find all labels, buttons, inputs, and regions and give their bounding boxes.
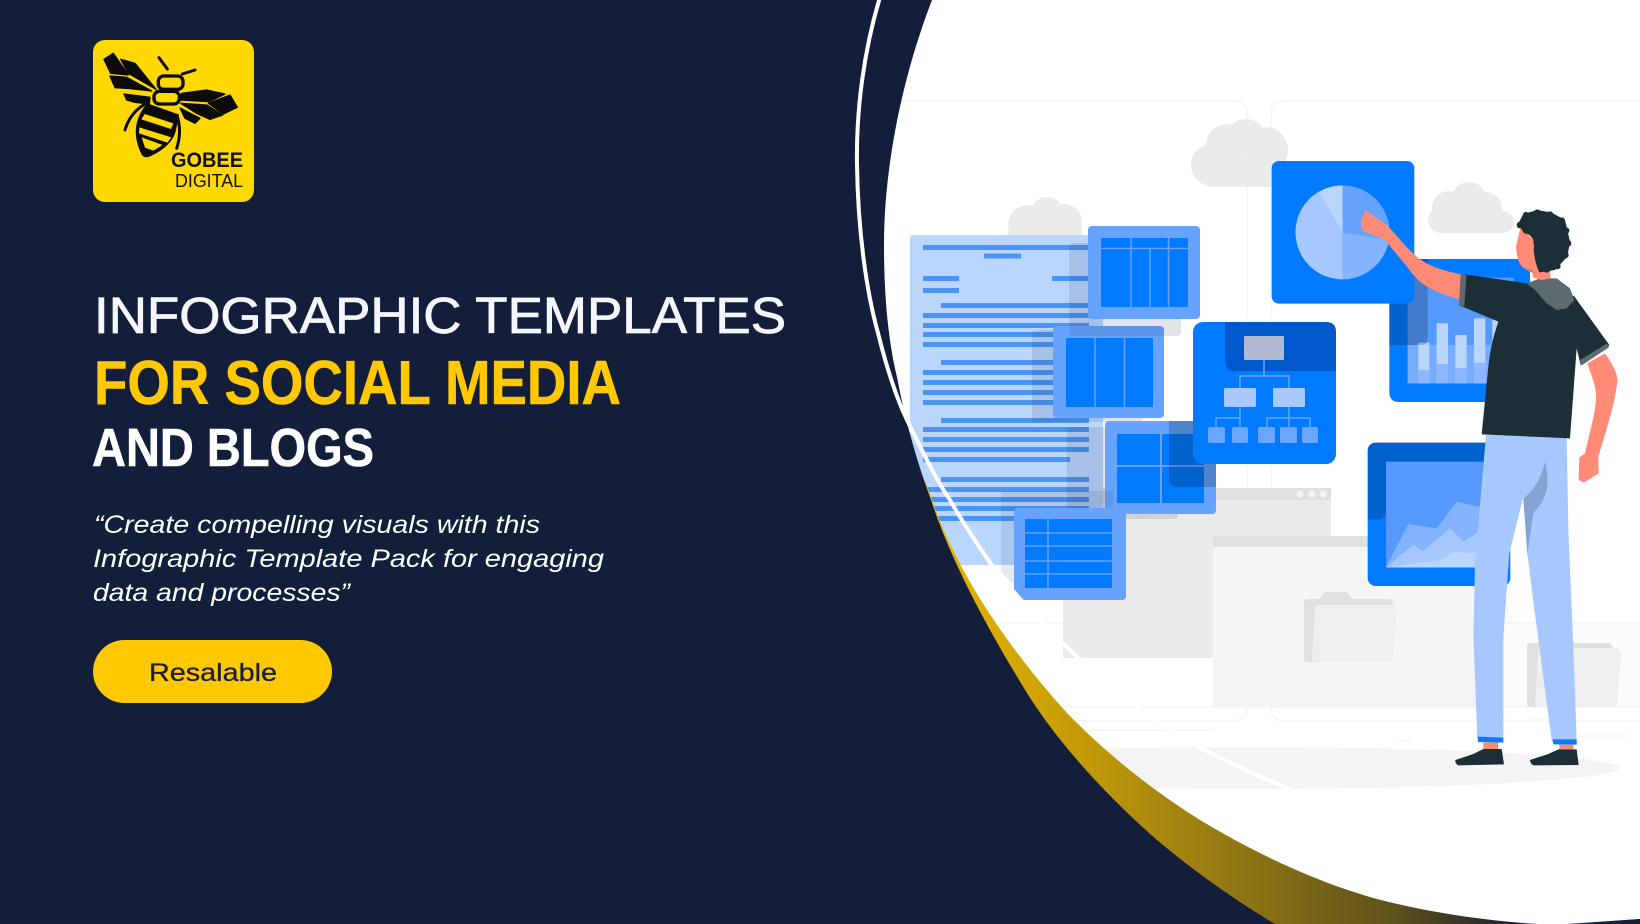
- area chart card: [1368, 443, 1510, 586]
- logo: Gobee Digital: [93, 40, 254, 202]
- quote text: Infographic Template Pack for engaging: [93, 545, 604, 573]
- cloud: right: [1428, 182, 1514, 233]
- illustration background: windows, clouds and folders: [860, 101, 1640, 789]
- navy background panel: [0, 0, 1275, 924]
- window: light grey: [1213, 536, 1503, 707]
- folder: right: [1527, 643, 1621, 707]
- icon: bee: [104, 53, 237, 157]
- table card: rows: [1001, 491, 1126, 600]
- title line 1: INFOGRAPHIC TEMPLATES: [94, 287, 786, 344]
- org chart card: [1193, 322, 1336, 464]
- document page: [910, 235, 1103, 565]
- folder: centre: [1304, 592, 1397, 662]
- cloud: behind document: [1007, 197, 1082, 245]
- title line 3: AND BLOGS: [92, 418, 374, 478]
- logo wordmark: GOBEE: GOBEE: [171, 149, 243, 172]
- head and hair: [1516, 209, 1571, 280]
- quote text: “Create compelling visuals with this: [94, 511, 540, 539]
- title line 2: FOR SOCIAL MEDIA: [94, 349, 621, 418]
- table card: quadrants: [1067, 421, 1216, 519]
- legs and shoes: [1455, 435, 1579, 765]
- floor shadow: [881, 747, 1619, 789]
- logo wordmark: DIGITAL: DIGITAL: [175, 171, 243, 191]
- curved gold accent: [900, 480, 1640, 924]
- button: Resalable: Resalable: [149, 659, 277, 687]
- bar chart card: [1389, 259, 1530, 402]
- quote text: [93, 511, 604, 607]
- button: Resalable: [93, 640, 332, 703]
- quote text: data and processes”: [93, 579, 352, 607]
- table card: three columns: [1032, 326, 1164, 422]
- navy corner sliver: [1520, 919, 1640, 924]
- white arc stroke: [857, 0, 1296, 792]
- torso and arms: [1361, 210, 1617, 483]
- table card: header grid: [1069, 226, 1200, 336]
- pie chart card: [1272, 161, 1414, 304]
- person pointing at chart: [1361, 209, 1617, 765]
- window: large grey: [1063, 488, 1331, 658]
- cloud: top centre: [1191, 119, 1290, 187]
